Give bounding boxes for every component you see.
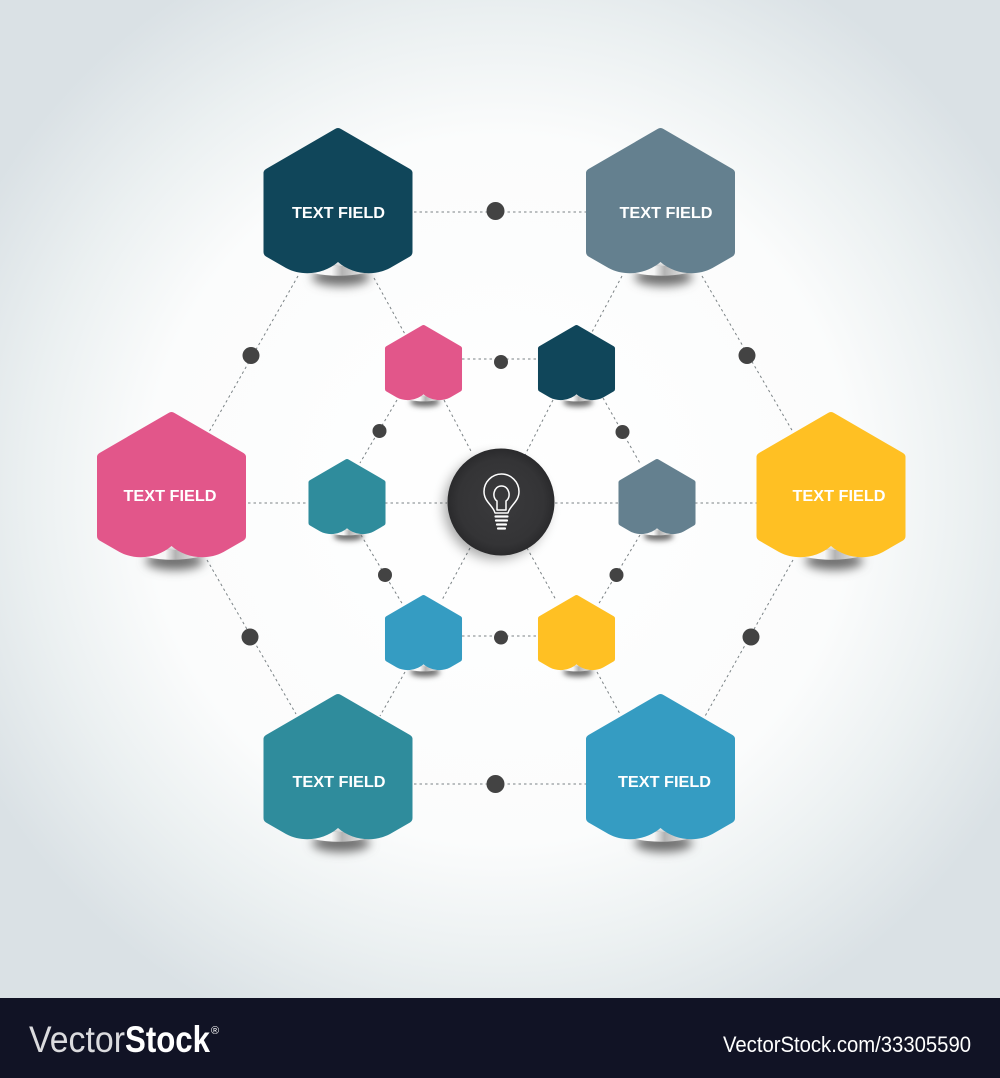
- hexagon: top left, navy: TEXT FIELD: [292, 205, 385, 222]
- footer image id: VectorStock.com/33305590: [723, 1032, 971, 1057]
- hexagon: left, pink: TEXT FIELD: [124, 488, 216, 505]
- hexagon: bottom left, teal: [264, 694, 412, 852]
- central hub with light bulb: [444, 448, 554, 559]
- hexagon: right, yellow: [756, 412, 906, 570]
- registered mark: ®: [211, 1025, 219, 1037]
- hexagon: bottom right, blue: [586, 694, 735, 852]
- dotted connector lines: [207, 212, 793, 784]
- hexagon: bottom right, blue: TEXT FIELD: [618, 774, 711, 791]
- small hexagon: upper right, navy: [538, 325, 615, 407]
- hexagon: top right, slate: TEXT FIELD: [620, 205, 712, 222]
- hexagon: top right, slate: [586, 128, 735, 286]
- hexagon: bottom left, teal: TEXT FIELD: [292, 774, 386, 791]
- small hexagon: middle right, slate: [618, 459, 696, 541]
- connector dots: [242, 202, 760, 793]
- small hexagon: middle left, teal: [308, 459, 386, 541]
- footer bar: [0, 998, 1000, 1078]
- small hexagon: upper left, pink: [385, 325, 462, 407]
- hexagon: top left, navy: [264, 128, 412, 286]
- small hexagon: lower left, blue: [385, 595, 462, 677]
- footer logo: VectorStock: [29, 1019, 210, 1060]
- hexagon: left, pink: [97, 412, 246, 570]
- hexagon: right, yellow: TEXT FIELD: [792, 488, 886, 505]
- small hexagon: lower right, yellow: [538, 595, 615, 677]
- icon: light bulb: [484, 474, 519, 528]
